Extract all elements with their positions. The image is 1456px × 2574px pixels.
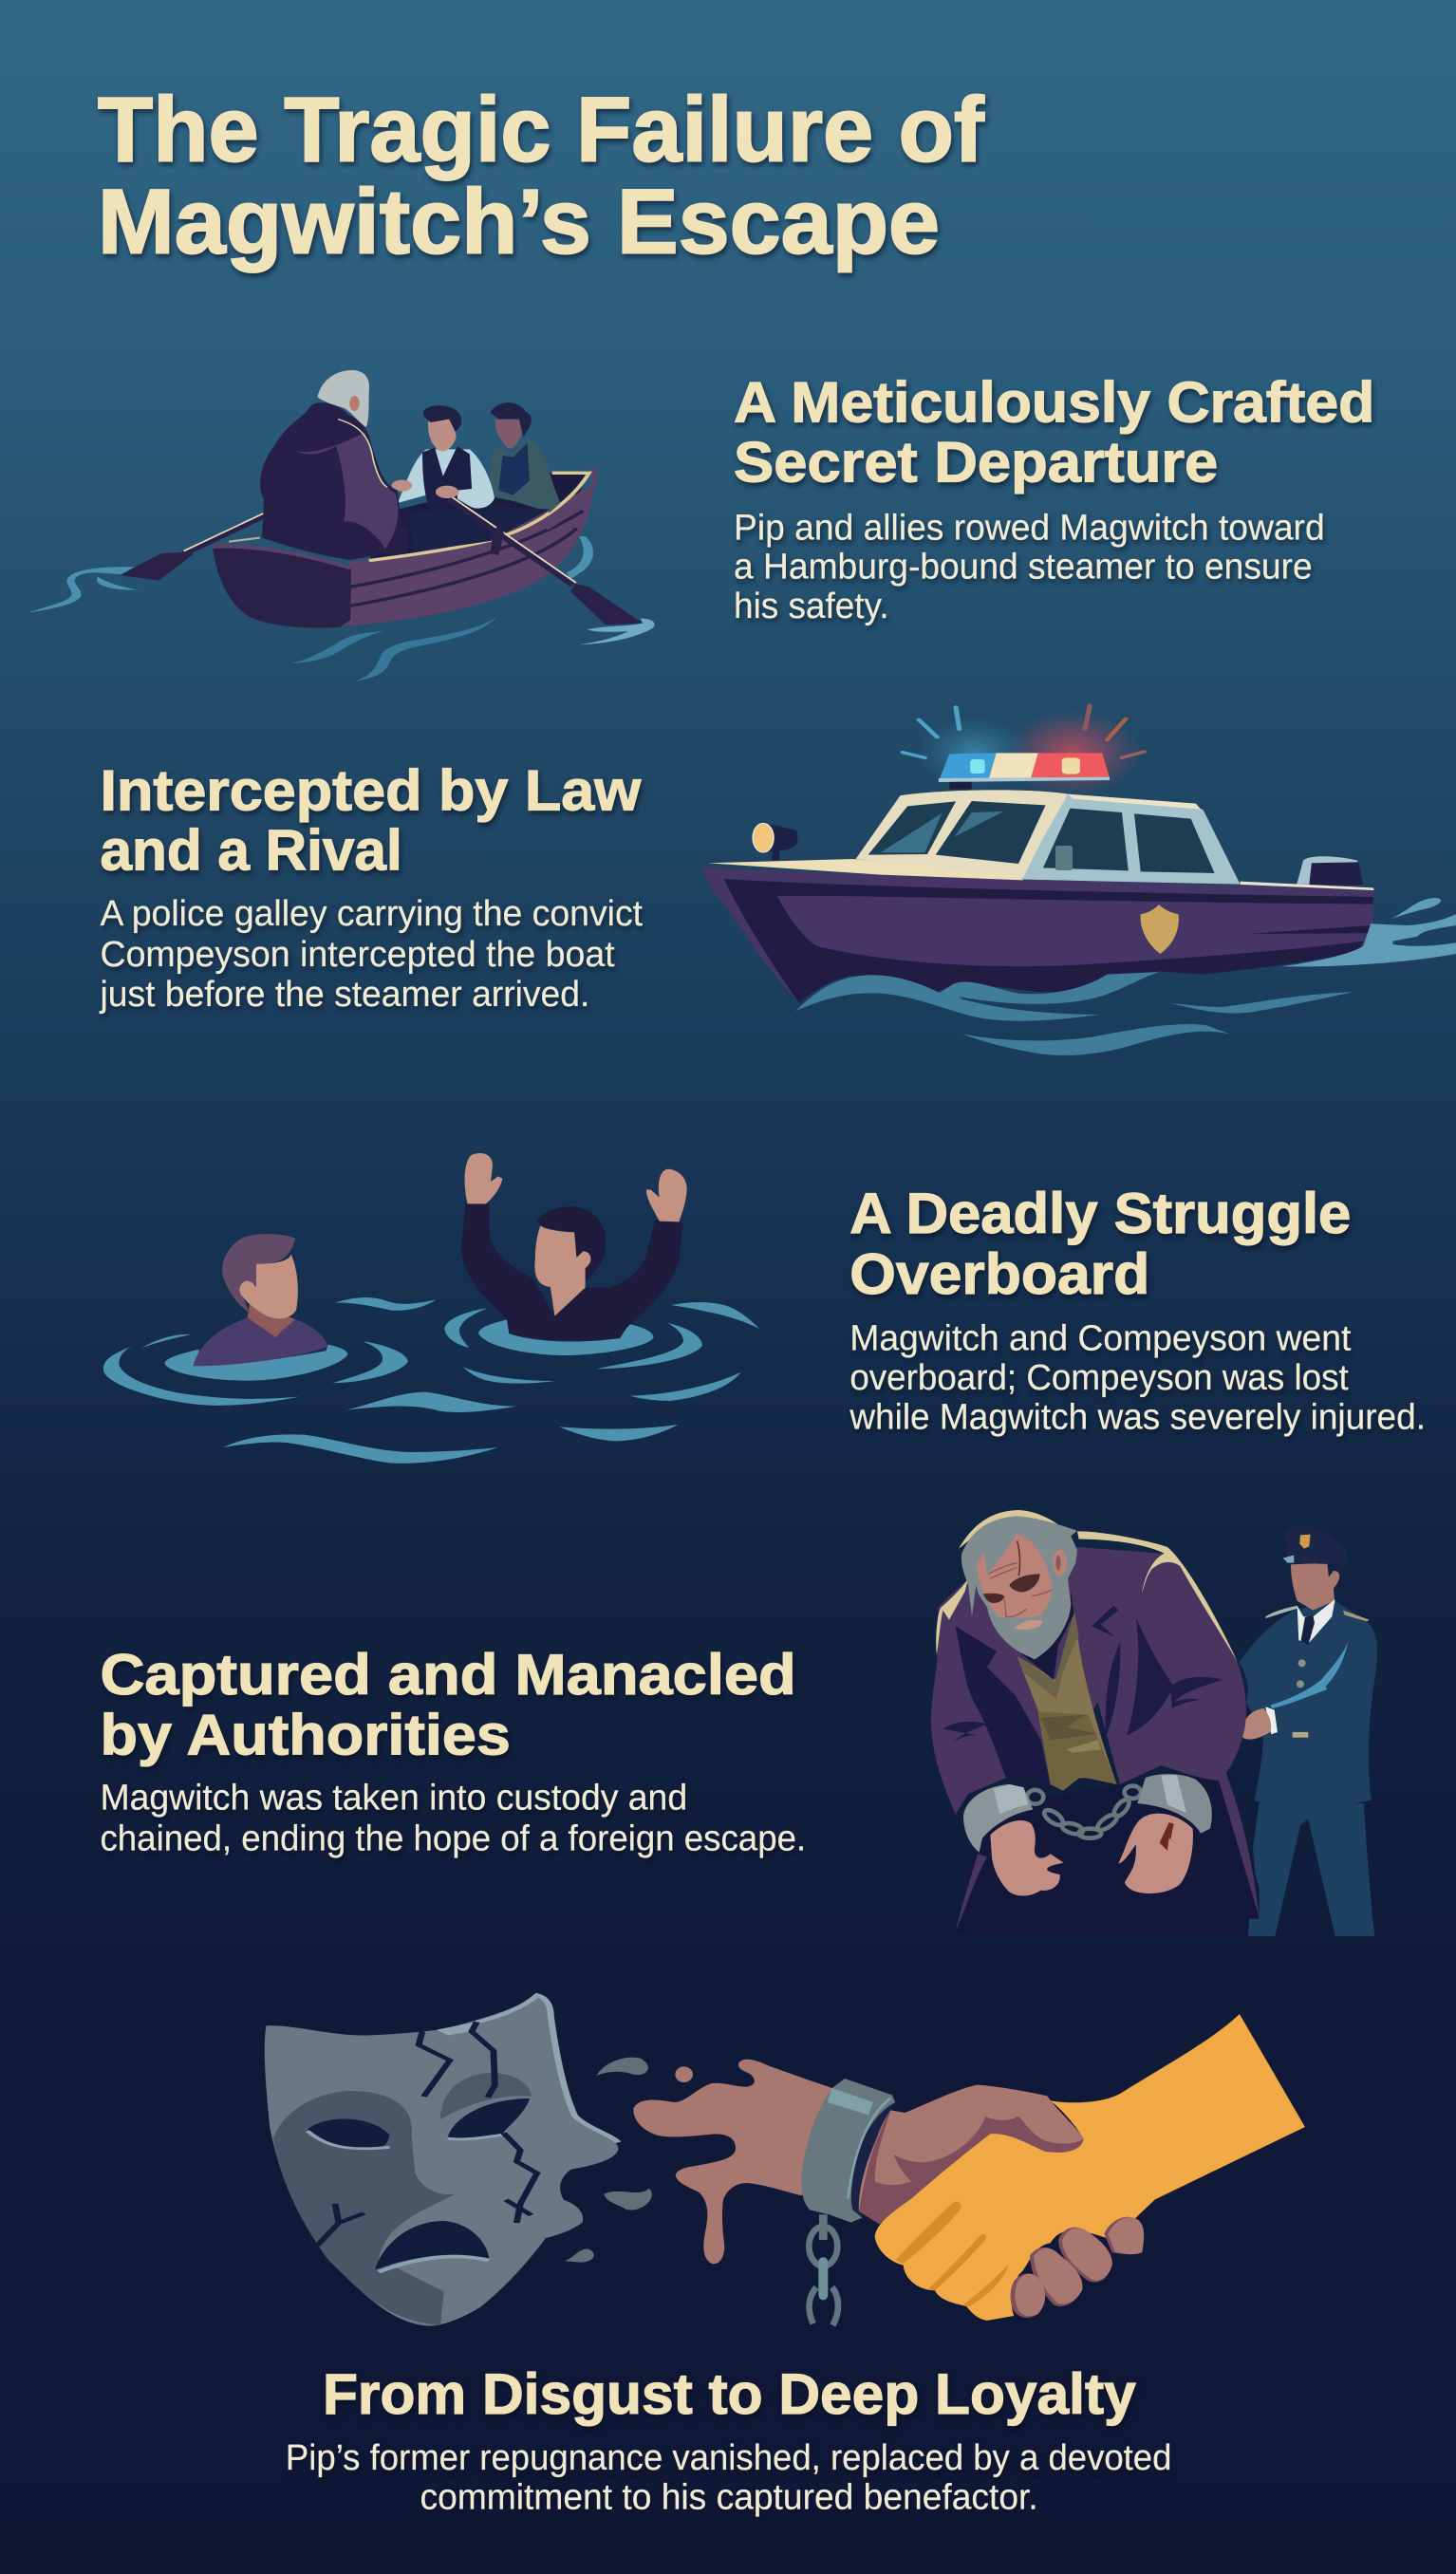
section 3 text: while Magwitch was severely injured.: [849, 1398, 1426, 1438]
right oar: [450, 497, 643, 625]
illustration: Magwitch captured by officer: [931, 1525, 1377, 1936]
face: [977, 1534, 1067, 1630]
right swimmer with raised arms: [461, 1153, 687, 1340]
waistcoat: [1017, 1632, 1117, 1791]
illustration: hands group: [963, 1774, 1212, 1896]
illustration: Magwitch head: [959, 1510, 1079, 1699]
spotlight: [753, 823, 797, 861]
section 3 text: Overboard: [849, 1241, 1149, 1306]
section 4 text: Magwitch was taken into custody and: [100, 1779, 687, 1819]
chain: [809, 2214, 838, 2325]
hair and beard: [961, 1516, 1077, 1659]
section 1 text: his safety.: [734, 587, 888, 626]
siren glow: [918, 709, 1142, 797]
section 3 text: A Deadly Struggle: [849, 1181, 1351, 1245]
grey fragments: [565, 2058, 652, 2263]
Magwitch in cloak: [260, 370, 408, 560]
finger creases: [895, 2202, 1009, 2306]
mask shadow: [273, 2091, 455, 2325]
section 2 text: Compeyson intercepted the boat: [100, 935, 615, 975]
Magwitch coat: [931, 1531, 1260, 1936]
left oar: [120, 513, 264, 581]
title: The Tragic Failure of: [98, 77, 985, 180]
mask cracks: [317, 2022, 537, 2246]
handcuffs and chain: [963, 1774, 1212, 1853]
cuff: [801, 2079, 895, 2223]
section 4 text: by Authorities: [100, 1702, 511, 1766]
illustration: rowboat escape: [29, 370, 655, 681]
mask edge highlights: [476, 1995, 619, 2142]
ripples: [103, 1297, 759, 1464]
section 2 text: and a Rival: [100, 817, 402, 882]
section 2 text: A police galley carrying the convict: [100, 894, 643, 934]
section 5 text: [286, 2361, 1171, 2518]
illustration: two men in the water: [103, 1153, 759, 1464]
siren light bar: [939, 753, 1110, 790]
section 1 text: A Meticulously Crafted: [734, 369, 1374, 434]
waves and wake: [795, 898, 1456, 1055]
boat hull: [213, 468, 594, 628]
collar gap and waistcoat trim: [1017, 1592, 1079, 1699]
person at the back: green coat: [490, 402, 560, 513]
person in the middle: rower: [391, 405, 550, 552]
siren rays: [903, 705, 1144, 757]
mask eyes: [308, 2119, 389, 2148]
illustration: police boat: [703, 705, 1456, 1055]
cabin: [856, 790, 1241, 885]
yellow hand: [875, 2014, 1305, 2321]
hands: [990, 1814, 1193, 1896]
left swimmer: [193, 1234, 328, 1366]
gold shield badge: [1141, 905, 1179, 954]
title: Magwitch’s Escape: [98, 169, 940, 272]
section 1 text: [734, 369, 1374, 626]
section 5 text: From Disgust to Deep Loyalty: [323, 2361, 1136, 2426]
section 5 text: commitment to his captured benefactor.: [420, 2478, 1038, 2518]
clasping fingers: [1011, 2217, 1144, 2318]
section 2 text: just before the steamer arrived.: [100, 975, 589, 1015]
section 3 text: Magwitch and Compeyson went: [849, 1318, 1352, 1358]
water wisps around the rowboat: [29, 536, 655, 681]
section 3 text: overboard; Compeyson was lost: [849, 1358, 1349, 1398]
forearm with thumb: [859, 2085, 1084, 2224]
section 4 text: chained, ending the hope of a foreign escape.: [100, 1819, 806, 1858]
hair edge: [959, 1510, 1058, 1549]
mask mouth: [375, 2221, 489, 2269]
illustration: cuffed hand and handshake: [633, 2014, 1305, 2325]
section 1 text: Secret Departure: [734, 429, 1218, 494]
melting wrist: [633, 2060, 832, 2264]
section 4 text: [100, 1642, 806, 1858]
section 2 text: Intercepted by Law: [100, 758, 642, 823]
section 1 text: a Hamburg-bound steamer to ensure: [734, 547, 1313, 587]
motor: [1297, 856, 1363, 886]
police officer: [1239, 1525, 1377, 1936]
section 5 text: Pip’s former repugnance vanished, replaced by a devoted: [286, 2438, 1171, 2478]
title: [98, 77, 985, 272]
section 4 text: Captured and Manacled: [100, 1642, 796, 1707]
hull with deck: [703, 859, 1374, 1003]
illustration: broken mask: [265, 1995, 652, 2326]
section 2 text: [100, 758, 643, 1015]
section 3 text: [849, 1181, 1426, 1438]
section 1 text: Pip and allies rowed Magwitch toward: [734, 508, 1325, 548]
